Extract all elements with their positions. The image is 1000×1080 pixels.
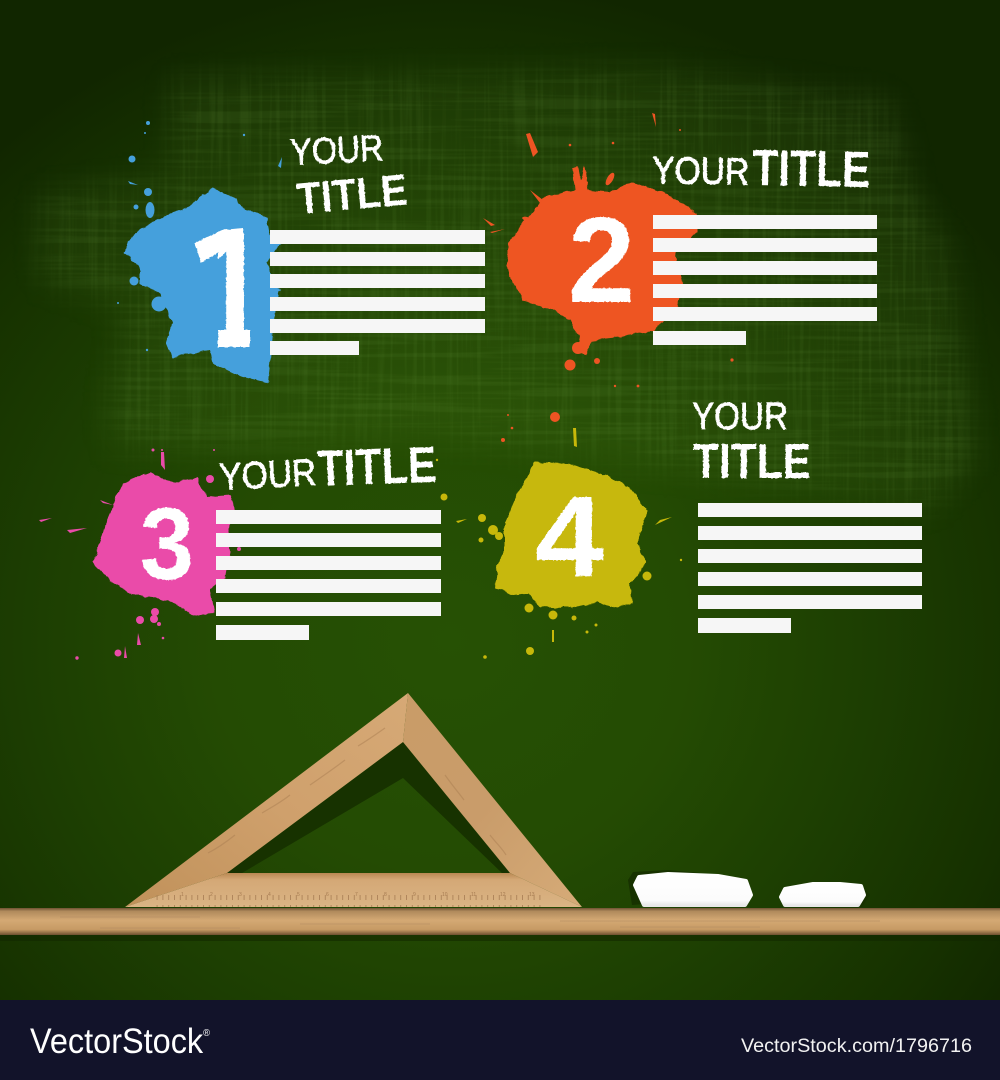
text placeholder bars [270, 230, 485, 355]
ruler scale: 11 [471, 892, 476, 898]
title: YOUR [218, 452, 317, 499]
ruler scale: 8 [384, 892, 387, 898]
ruler scale: 2 [210, 892, 213, 898]
text placeholder bars [216, 510, 441, 640]
ruler scale: 5 [297, 892, 300, 898]
panel: step 4 [436, 396, 922, 659]
footer bar [0, 1000, 1000, 1080]
ruler scale: 3 [239, 892, 242, 898]
title: YOUR [692, 396, 788, 438]
ledge shadow [0, 935, 1000, 941]
title: YOUR [652, 150, 750, 194]
chalk piece small [781, 884, 870, 907]
ruler scale: 10 [442, 892, 448, 898]
number 3: 3 [140, 487, 194, 601]
orange splat [483, 113, 734, 387]
title [289, 127, 409, 224]
number 1: 1 [196, 198, 268, 383]
pink splat [39, 448, 241, 660]
chalk piece large [628, 870, 751, 905]
footer logo: VectorStock [30, 1022, 217, 1061]
number 2: 2 [568, 192, 635, 328]
ruler scale [153, 892, 541, 907]
footer logo: ® [203, 1028, 211, 1039]
title [652, 139, 871, 198]
title: TITLE [752, 139, 871, 198]
title: TITLE [693, 435, 811, 489]
title: TITLE [295, 165, 409, 224]
stray orange drops [501, 412, 560, 442]
number 1 [194, 228, 250, 348]
ruler scale: 7 [355, 892, 358, 898]
panel: step 2 [483, 113, 877, 387]
text placeholder bars [698, 503, 922, 633]
ruler scale: 1 [181, 892, 184, 898]
panel: step 3 [39, 436, 441, 660]
blue splat [117, 121, 282, 383]
wooden chalk ledge [0, 908, 1000, 935]
ruler scale: 12 [500, 892, 506, 898]
title: TITLE [316, 436, 437, 497]
ruler scale: 9 [413, 892, 416, 898]
footer image id: VectorStock.com/1796716 [741, 1036, 972, 1057]
ruler scale: 13 [529, 892, 535, 898]
title: YOUR [289, 127, 384, 173]
triangle shadow on board [227, 742, 510, 873]
panel: step 1 [117, 121, 485, 383]
wooden set square [125, 693, 582, 907]
chalk scribble texture [34, 68, 977, 506]
title [692, 396, 811, 489]
number 4: 4 [535, 473, 604, 601]
yellow splat [436, 428, 682, 659]
ruler scale: 4 [268, 892, 271, 898]
ruler scale: 6 [326, 892, 329, 898]
title [218, 436, 437, 499]
text placeholder bars [653, 215, 877, 345]
